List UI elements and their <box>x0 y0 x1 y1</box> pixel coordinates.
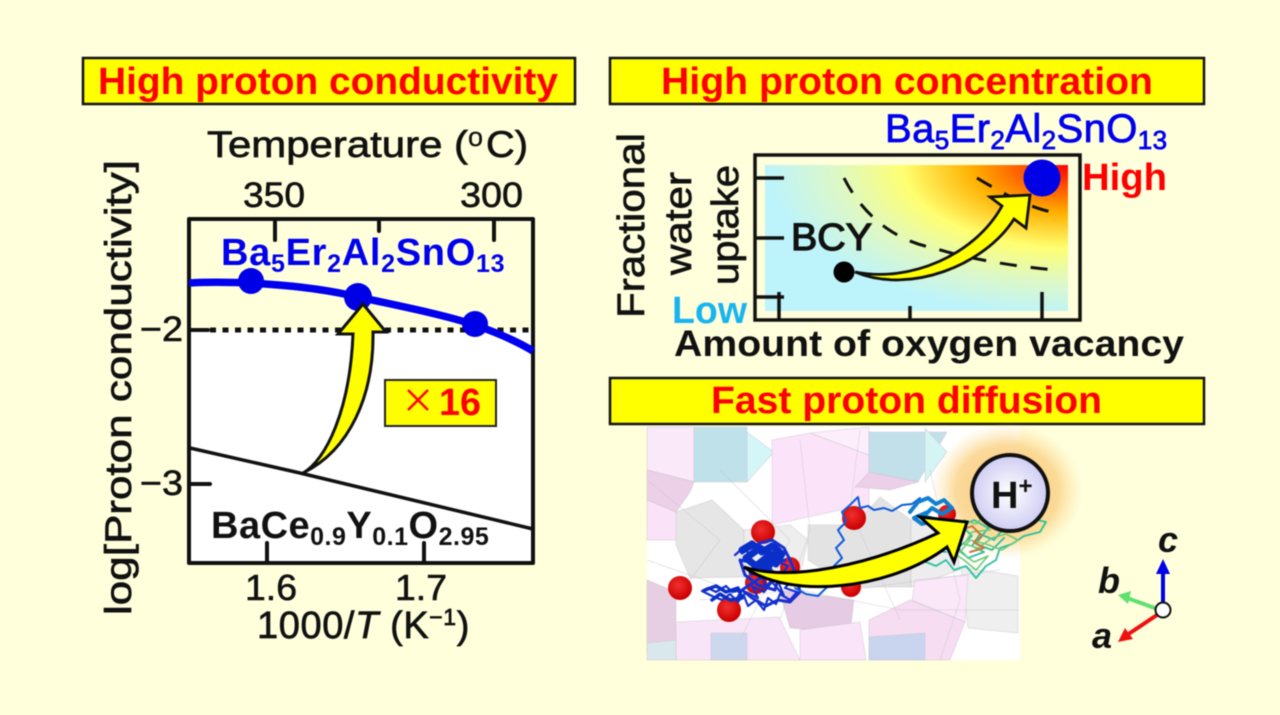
heading: High proton conductivity: High proton conductivity <box>98 61 558 103</box>
y tick labels: −2 <box>140 310 183 349</box>
frame and ticks <box>755 155 1080 320</box>
label: BaCe0.9Y0.1O2.95: O <box>409 505 439 547</box>
label: BaCe0.9Y0.1O2.95: 0.1 <box>372 523 409 551</box>
axis title: fractional water uptake: water <box>658 172 700 276</box>
plot area <box>190 330 533 563</box>
blue conductivity curve <box>189 282 533 351</box>
heading: Fast proton diffusion <box>610 378 1204 424</box>
arrow: yellow enhancement <box>303 304 386 473</box>
x axis title: temperature <box>207 122 528 165</box>
x axis title: 1000/T: 1000/T (K <box>257 605 429 647</box>
label: Ba5Er2Al2SnO13: Er <box>286 232 327 274</box>
x axis title: temperature: o <box>468 122 483 152</box>
label: Low: Low <box>672 290 747 332</box>
arrow: yellow <box>855 195 1030 280</box>
label: Ba5Er2Al2SnO13: 5 <box>935 125 950 155</box>
label: BaCe0.9Y0.1O2.95: Y <box>346 505 372 547</box>
label: Ba5Er2Al2SnO13: 2 <box>1042 125 1057 155</box>
panel: water uptake chart <box>611 107 1184 364</box>
label: Ba5Er2Al2SnO13: Al <box>342 232 381 274</box>
proton H+: H <box>991 475 1018 517</box>
label: Ba5Er2Al2SnO13: Er <box>950 107 990 151</box>
x axis title: 1000/T: ) <box>457 605 470 647</box>
axis title: fractional water uptake: uptake <box>705 165 747 285</box>
label: Ba5Er2Al2SnO13: 13 <box>1138 125 1168 155</box>
label: BaCe0.9Y0.1O2.95: BaCe <box>211 505 310 547</box>
glow around proton <box>931 423 1083 559</box>
temperature tick labels: 350 <box>243 176 305 215</box>
x tick labels: 1.7 <box>395 567 447 608</box>
heading: High proton concentration: High proton concentration <box>661 61 1153 103</box>
axis title: oxygen vacancy: Amount of oxygen vacancy <box>674 323 1184 364</box>
label: Ba5Er2Al2SnO13: 13 <box>476 250 505 278</box>
label: Ba5Er2Al2SnO13: Ba <box>221 232 271 274</box>
heat map <box>765 165 1068 311</box>
label: Ba5Er2Al2SnO13: 2 <box>381 250 396 278</box>
x tick labels: 1.6 <box>245 567 297 608</box>
label: High: High <box>1082 157 1167 199</box>
label: Ba5Er2Al2SnO13: Al <box>1005 107 1042 151</box>
x axis title: temperature: C) <box>486 124 528 165</box>
x axis title: 1000/T: −1 <box>429 604 457 630</box>
panel: conductivity chart <box>98 122 533 647</box>
label: Ba5Er2Al2SnO13: SnO <box>1057 107 1138 151</box>
red oxygen atoms <box>668 505 956 622</box>
label: Ba5Er2Al2SnO13: Ba <box>885 107 935 151</box>
proton H+: + <box>1018 473 1032 500</box>
y tick labels <box>140 310 183 503</box>
proton H+ <box>972 455 1048 531</box>
axis title: fractional water uptake: Fractional <box>611 133 653 318</box>
label: Ba5Er2Al2SnO13: 2 <box>327 250 342 278</box>
dashed contours <box>844 178 1056 270</box>
dotted reference line <box>210 328 533 332</box>
crystal structure backdrop <box>647 427 1020 660</box>
callout: x16: 16 <box>439 382 481 424</box>
point: BCY <box>834 262 854 282</box>
y tick labels: −3 <box>140 464 183 503</box>
icon: crystal axes: b <box>1098 560 1120 601</box>
x axis title: temperature: Temperature ( <box>207 124 469 165</box>
arrow: yellow diffusion <box>744 517 967 587</box>
panel: proton diffusion simulation <box>647 423 1178 660</box>
label: BaCe0.9Y0.1O2.95: 2.95 <box>439 523 489 551</box>
axis title: fractional water uptake <box>611 133 747 318</box>
heading: Fast proton diffusion: Fast proton diffusion <box>711 380 1102 422</box>
label: Ba5Er2Al2SnO13: 5 <box>271 250 286 278</box>
label: BCY: BCY <box>791 217 872 259</box>
icon: crystal axes: a <box>1092 615 1112 656</box>
plot frame and ticks <box>189 219 533 563</box>
icon: crystal axes: c <box>1158 519 1178 560</box>
y axis title: log[Proton conductivity] <box>98 160 139 615</box>
icon: crystal axes <box>1092 519 1178 656</box>
label: BaCe0.9Y0.1O2.95: 0.9 <box>310 523 346 551</box>
proton trajectories <box>702 497 1046 610</box>
point: Ba5Er2Al2SnO13 <box>1024 160 1060 196</box>
data points <box>238 268 488 337</box>
label: Ba5Er2Al2SnO13: 2 <box>990 125 1005 155</box>
temperature tick labels: 300 <box>460 176 523 215</box>
label: Ba5Er2Al2SnO13: SnO <box>396 232 476 274</box>
temperature tick labels <box>243 176 523 215</box>
callout: x16 <box>385 380 496 426</box>
x tick labels <box>245 567 447 608</box>
BCY line <box>190 448 533 529</box>
